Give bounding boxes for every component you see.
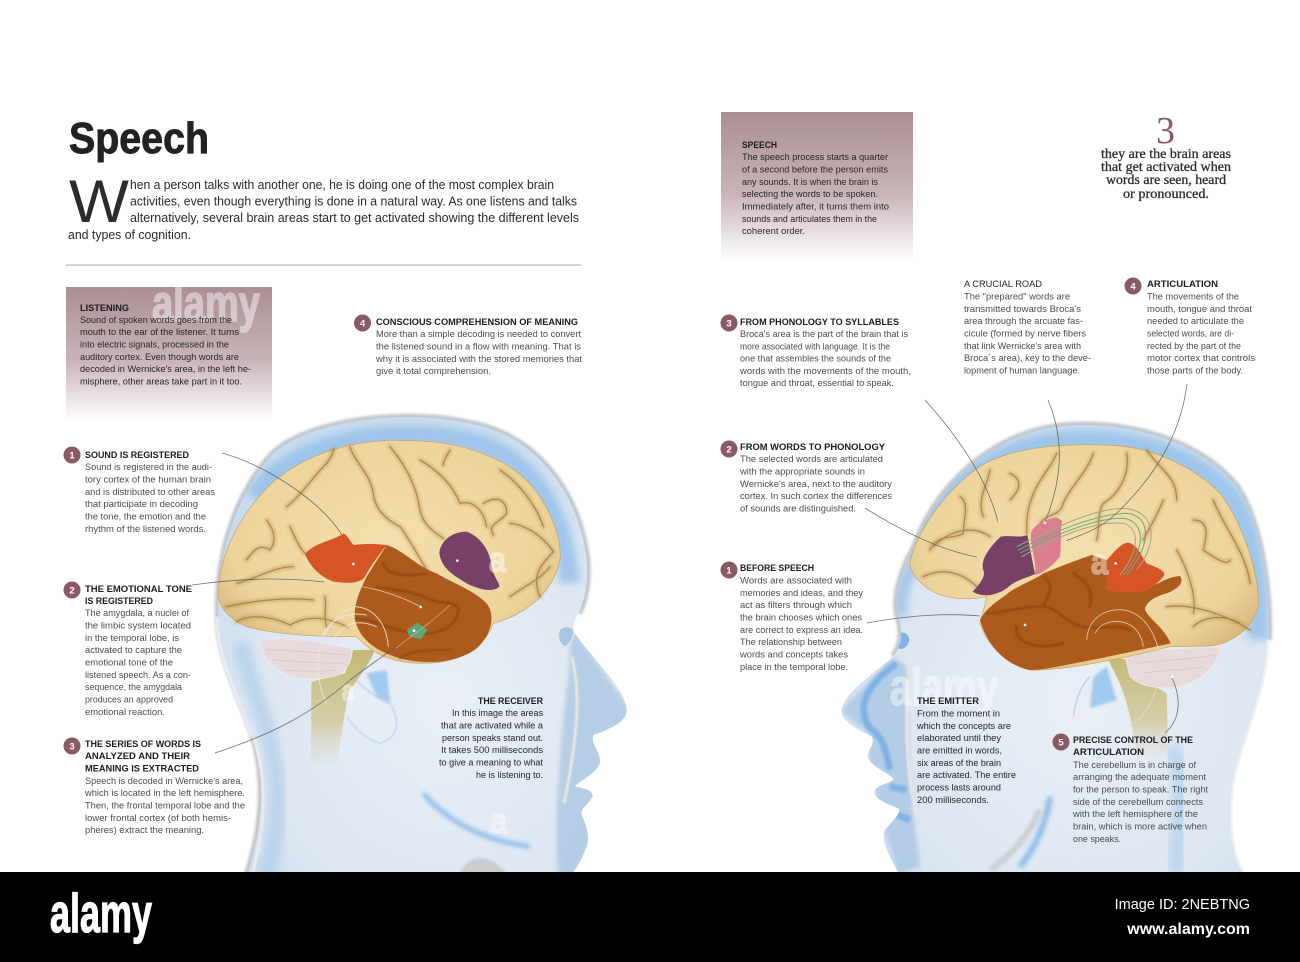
callout 5: precise control of the articulation: brain, which is more active when (1073, 822, 1207, 832)
callout 2: the emotional tone: produces an approved (85, 694, 173, 706)
panel: speech: any sounds. It is when the brain is (742, 177, 878, 188)
number badge 3: 3 (726, 318, 732, 330)
callout 1: sound is registered: Sound is registered in the audi- (85, 462, 212, 473)
callout 2: the emotional tone: activated to capture the (85, 645, 182, 656)
text block: the receiver: that are activated while a (441, 720, 544, 732)
text block: a crucial road: transmitted towards Broca's (964, 304, 1081, 315)
callout 4: articulation: motor cortex that controls (1147, 353, 1255, 364)
callout 4: articulation: mouth, tongue and throat (1147, 304, 1252, 315)
text block: the emitter: are activated. The entire (917, 770, 1016, 781)
callout 1: sound is registered (64, 446, 215, 535)
panel: listening: into electric signals, processed in the (80, 340, 229, 350)
callout 3: from phonology to syllables (720, 314, 911, 389)
callout 1: before speech: BEFORE SPEECH (740, 563, 814, 574)
callout 2: the emotional tone: sequence, the amygdala (85, 682, 183, 693)
panel: listening: auditory cortex. Even though words are (80, 352, 239, 363)
text block: the emitter: elaborated until they (917, 733, 1001, 744)
callout 1: sound is registered: and is distributed to other areas (85, 487, 215, 498)
text block: the emitter: process lasts around (917, 782, 1001, 794)
callout 1: before speech: are correct to express an idea. (740, 625, 863, 636)
callout 4: articulation: those parts of the body. (1147, 366, 1243, 376)
footer bar (0, 872, 1300, 962)
callout 5: precise control of the articulation: ARTICULATION (1073, 747, 1144, 758)
panel: speech (721, 112, 913, 262)
website: www.alamy.com (1126, 921, 1250, 938)
area: temporal lobe orange-brown (980, 555, 1181, 670)
number badge 1 (720, 562, 738, 578)
callout 3: the series of words (64, 738, 245, 836)
text block: a crucial road (964, 279, 1091, 376)
callout 4: articulation: needed to articulate the (1147, 316, 1244, 327)
callout 4: conscious comprehension: give it total comprehension. (376, 366, 491, 377)
brainstem and spinal cord (308, 650, 375, 770)
number badge 3: 3 (69, 742, 75, 752)
logo alamy: alamy (50, 882, 152, 944)
callout: 3 brain areas: or pronounced. (1123, 187, 1209, 202)
callout 4: conscious comprehension (354, 314, 582, 377)
text block: the emitter: six areas of the brain (917, 758, 1001, 769)
cerebellum (259, 639, 352, 679)
head silhouette: emitter (842, 425, 1269, 873)
brainstem and spinal cord (1107, 657, 1168, 763)
activation dots (352, 559, 459, 632)
text block: the emitter: are emitted in words, (917, 746, 1002, 756)
brain (218, 440, 560, 663)
callout 4: articulation: rected by the part of the (1147, 341, 1241, 352)
text block: a crucial road: that link Wernicke's area with (964, 341, 1081, 352)
cerebellum (1125, 647, 1220, 688)
inner ear arcs (1087, 610, 1160, 728)
brain (910, 445, 1258, 678)
text block: the emitter: From the moment in (917, 708, 1000, 720)
leader lines: receiver (192, 453, 450, 753)
arcuate fasciculus fibers (1017, 508, 1151, 575)
area: motor cortex red-orange (1107, 543, 1164, 592)
callout 4: conscious comprehension: why it is associated with the stored memories that (375, 354, 582, 365)
callout 3: the series of words: ANALYZED AND THEIR (85, 751, 190, 762)
intro paragraph with drop cap: activities, even though everything is done in a natural way. As one listens and talks (130, 194, 577, 208)
text block: the emitter: 200 milliseconds. (917, 795, 989, 806)
callout 4: conscious comprehension: CONSCIOUS COMPREHENSION OF MEANING (376, 317, 578, 328)
head silhouette: receiver (217, 417, 630, 883)
callout 5: precise control of the articulation: one speaks. (1073, 834, 1121, 845)
watermarks: a (342, 675, 354, 706)
callout 3: the series of words: which is located in the left hemisphere. (84, 788, 245, 799)
watermarks: a (1091, 541, 1109, 582)
text block: the receiver: he is listening to. (476, 770, 543, 781)
callout 4: articulation (1124, 278, 1255, 376)
panel: listening (66, 275, 272, 421)
callout 2: from words to phonology: of sounds are distinguished. (740, 504, 856, 514)
callout 2: the emotional tone: emotional tone of the (85, 658, 173, 668)
callout 4: articulation: ARTICULATION (1147, 279, 1218, 290)
callout 1: sound is registered: SOUND IS REGISTERED (85, 450, 189, 461)
leader lines: emitter (865, 384, 1187, 733)
panel: listening: misphere, other areas take part in it too. (80, 376, 242, 388)
callout 1: before speech: memories and ideas, and they (740, 588, 863, 599)
text block: the receiver (439, 696, 544, 781)
area: Wernicke's purple (973, 535, 1035, 595)
callout 4: conscious comprehension: the listened sound in a flow with meaning. That is (376, 342, 581, 352)
text block: the receiver: THE RECEIVER (478, 696, 543, 707)
callout 2: the emotional tone: the limbic system located (85, 620, 191, 632)
text block: the emitter (916, 696, 1016, 806)
callout 3: the series of words: Then, the frontal temporal lobe and the (85, 800, 245, 812)
callout 5: precise control of the articulation: The cerebellum is in charge of (1073, 760, 1196, 771)
brain sulci (227, 447, 553, 627)
panel: speech: sounds and articulates them in the (742, 214, 877, 225)
panel: speech: selecting the words to be spoken. (742, 189, 878, 200)
image id: Image ID: 2NEBTNG (1115, 897, 1250, 913)
callout 2: from words to phonology (720, 440, 892, 514)
text block: the emitter: which the concepts are (916, 721, 1011, 732)
callout 5: precise control of the articulation: arranging the adequate moment (1073, 772, 1206, 783)
watermark alamy: alamy (152, 275, 260, 333)
callout: 3 brain areas: that get activated when (1101, 160, 1231, 175)
callout 5: precise control of the articulation: with the left hemisphere of the (1072, 809, 1198, 820)
callout 3: from phonology to syllables: one that assembles the sounds of the (740, 354, 891, 364)
watermarks: a (490, 800, 508, 841)
panel: speech: Immediately after, it turns them into (742, 202, 889, 212)
number badge 1: 1 (69, 450, 75, 462)
brain sulci (923, 450, 1250, 630)
heading: Speech: Speech (69, 114, 209, 163)
text block: a crucial road: lopment of human language. (964, 366, 1080, 376)
number badge 3 (720, 314, 738, 332)
panel: listening: decoded in Wernicke's area, in the left he- (80, 364, 251, 375)
panel: listening: Sound of spoken words goes from the (80, 315, 232, 326)
callout 2: from words to phonology: cortex. In such cortex the differences (740, 491, 892, 502)
callout 3: from phonology to syllables: words with the movements of the mouth, (739, 366, 911, 377)
callout 1: before speech (720, 562, 863, 673)
number badge 1 (64, 446, 80, 464)
watermarks: a (489, 539, 507, 580)
callout 2: from words to phonology: FROM WORDS TO PHONOLOGY (740, 442, 886, 453)
callout 1: sound is registered: that participate in decoding (85, 499, 198, 510)
number badge 2: 2 (726, 444, 732, 456)
intro paragraph with drop cap (68, 168, 579, 242)
text block: a crucial road: A CRUCIAL ROAD (964, 279, 1042, 290)
area: auditory cortex red-orange (305, 533, 387, 583)
text block: a crucial road: Broca´s area), key to the deve- (964, 353, 1091, 364)
drop cap W: W (69, 168, 129, 235)
callout 3: the series of words: THE SERIES OF WORDS IS (85, 739, 202, 750)
area: Broca's pink (1031, 517, 1062, 575)
callout 3: from phonology to syllables: tongue and throat, essential to speak. (740, 378, 894, 389)
callout 2: the emotional tone: The amygdala, a nuclei of (85, 608, 189, 619)
number badge 5 (1052, 734, 1070, 750)
callout 1: before speech: place in the temporal lobe. (740, 662, 848, 673)
text block: a crucial road: The "prepared" words are (964, 292, 1070, 302)
callout 5: precise control of the articulation: PRECISE CONTROL OF THE (1073, 735, 1194, 746)
callout 2: the emotional tone: emotional reaction. (85, 707, 165, 718)
callout: 3 brain areas: words are seen, heard (1106, 173, 1226, 188)
callout 3: the series of words: lower frontal cortex (of both hemis- (85, 813, 231, 824)
callout: 3 brain areas: they are the brain areas (1101, 147, 1231, 162)
callout 2: the emotional tone: listened speech. As a con- (85, 670, 191, 681)
callout 4: conscious comprehension: More than a simple decoding is needed to convert (376, 329, 581, 340)
big number 3: 3 (1156, 110, 1175, 152)
number badge 2: 2 (69, 586, 75, 596)
callout 3: the series of words: pheres) extract the meaning. (85, 825, 204, 836)
callout 1: sound is registered: the tone, the emotion and the (85, 512, 206, 522)
callout 1: before speech: words and concepts takes (739, 650, 848, 660)
panel: listening: LISTENING (80, 303, 129, 314)
number badge 4 (354, 314, 371, 332)
intro paragraph with drop cap: alternatively, several brain areas start to get activated showing the different levels (130, 210, 579, 225)
number badge 4: 4 (1130, 282, 1136, 292)
area: temporal lobe orange-brown (355, 545, 491, 662)
callout 1: before speech: act as filters through which (740, 600, 852, 611)
text block: the receiver: to give a meaning to what (439, 758, 543, 768)
callout 2: from words to phonology: The selected words are articulated (740, 454, 883, 465)
watermarks: alamy (890, 659, 998, 717)
text block: a crucial road: area through the arcuate fas- (964, 316, 1083, 327)
intro paragraph with drop cap: and types of cognition. (68, 227, 191, 242)
callout 3: from phonology to syllables: Broca's area is the part of the brain that is (740, 329, 908, 340)
text block: the receiver: It takes 500 milliseconds (441, 745, 543, 756)
callout 1: sound is registered: rhythm of the listened words. (85, 524, 206, 535)
callout 2: the emotional tone: IS REGISTERED (85, 596, 153, 607)
callout 5: precise control of the articulation (1052, 734, 1208, 845)
callout 1: before speech: Words are associated with (740, 576, 852, 586)
number badge 3 (64, 738, 80, 754)
intro paragraph with drop cap: hen a person talks with another one, he is doing one of the most complex brain (130, 177, 554, 192)
area: amygdala green (407, 623, 427, 639)
callout 5: precise control of the articulation: for the person to speak. The right (1073, 784, 1208, 796)
number badge 4: 4 (360, 318, 366, 330)
number badge 1: 1 (726, 566, 732, 576)
callout 2: from words to phonology: with the appropriate sounds in (739, 466, 865, 478)
panel: speech: The speech process starts a quarter (742, 152, 889, 163)
text block: the receiver: person speaks stand out. (442, 733, 543, 744)
callout 5: precise control of the articulation: side of the cerebellum connects (1073, 797, 1203, 808)
callout 3: from phonology to syllables: more associated with language. It is the (740, 342, 890, 352)
panel: speech: of a second before the person emits (742, 164, 888, 176)
callout 2: the emotional tone: in the temporal lobe, is (85, 633, 179, 644)
callout: 3 brain areas (1101, 110, 1231, 202)
panel: listening: mouth to the ear of the listener. It turns (80, 327, 239, 338)
callout 2: from words to phonology: Wernicke's area, next to the auditory (740, 479, 892, 490)
callout 3: the series of words: MEANING IS EXTRACTED (85, 764, 199, 774)
illustration: receiver head with activated brain areas (217, 417, 630, 883)
callout 1: sound is registered: tory cortex of the human brain (85, 474, 211, 486)
text block: the emitter: THE EMITTER (917, 696, 979, 707)
callout 4: articulation: The movements of the (1147, 292, 1239, 302)
activation dots (997, 519, 1174, 678)
callout 2: the emotional tone: THE EMOTIONAL TONE (85, 584, 193, 595)
callout 4: articulation: selected words, are di- (1147, 328, 1234, 340)
number badge 2 (720, 440, 738, 458)
text block: the receiver: In this image the areas (452, 708, 543, 719)
callout 3: from phonology to syllables: FROM PHONOLOGY TO SYLLABLES (740, 317, 900, 328)
text block: a crucial road: cicule (formed by nerve fibers (964, 328, 1086, 340)
illustration: emitter head with activated brain areas (842, 425, 1269, 873)
callout 1: before speech: the brain chooses which ones (740, 612, 862, 624)
panel: speech: coherent order. (742, 226, 805, 237)
area: Wernicke's purple (439, 532, 499, 590)
divider (66, 264, 581, 266)
callout 1: before speech: The relationship between (740, 637, 842, 648)
callout 2: the emotional tone (64, 582, 193, 718)
watermarks (342, 539, 1109, 841)
panel: speech: SPEECH (742, 140, 777, 151)
inner ear arcs (318, 607, 388, 703)
callout 3: the series of words: Speech is decoded in Wernicke's area, (85, 776, 243, 787)
number badge 5: 5 (1058, 738, 1064, 748)
